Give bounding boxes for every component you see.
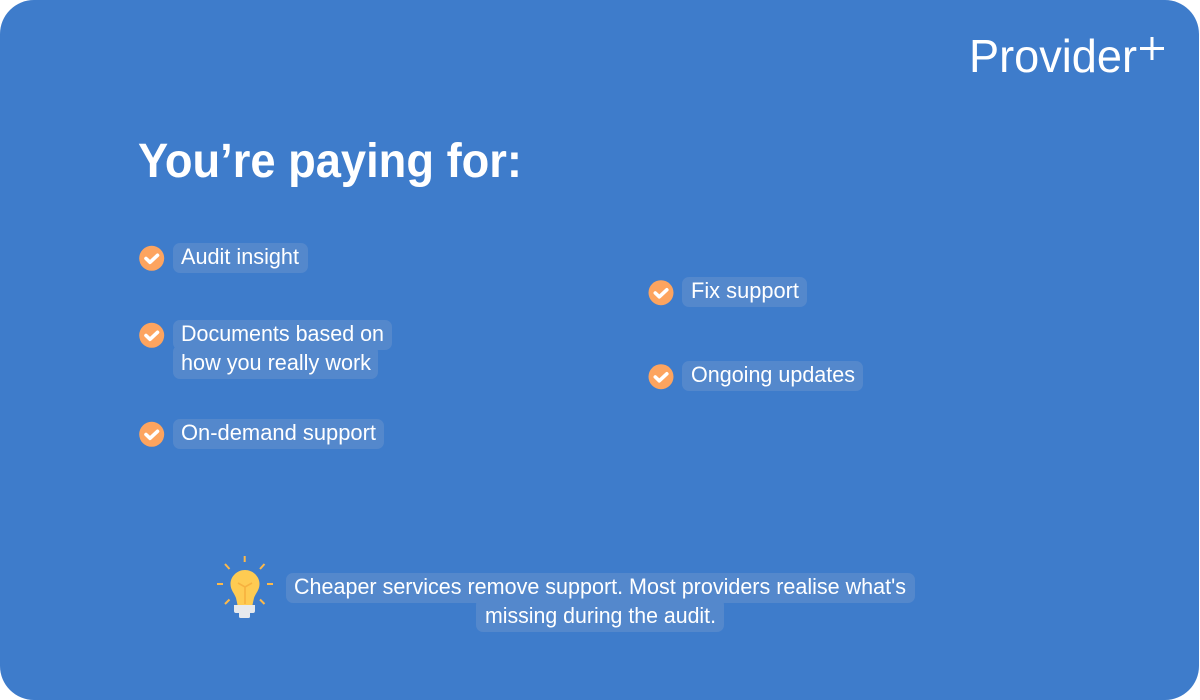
label: Fix support: Fix support (691, 278, 799, 303)
label: Audit insight: Audit insight (181, 244, 299, 269)
icon: check badge (648, 280, 674, 305)
list item: Ongoing updates (648, 361, 863, 391)
icon: check badge (139, 323, 164, 348)
title: You’re paying for: (138, 135, 522, 188)
label: Ongoing updates: Ongoing updates (691, 362, 855, 387)
list item: Audit insight (139, 243, 308, 273)
callout text (286, 573, 915, 632)
callout text: Cheaper services remove support. Most providers realise what's (294, 574, 906, 599)
icon: check badge (648, 364, 674, 389)
icon: light bulb (217, 556, 273, 618)
callout text: missing during the audit. (485, 603, 716, 628)
logo: Provider+: Provider (969, 30, 1137, 82)
label: On-demand support: On-demand support (181, 420, 376, 445)
label: Documents based on how you really work: how you really work (181, 350, 372, 375)
icon: check badge (139, 246, 164, 271)
label: Documents based on how you really work (173, 320, 392, 379)
icon: check badge (139, 422, 164, 447)
label: Documents based on how you really work: Documents based on (181, 321, 384, 346)
list item: On-demand support (139, 419, 384, 449)
list item: Fix support (648, 277, 807, 307)
list item: Documents based on how you really work (139, 320, 392, 379)
